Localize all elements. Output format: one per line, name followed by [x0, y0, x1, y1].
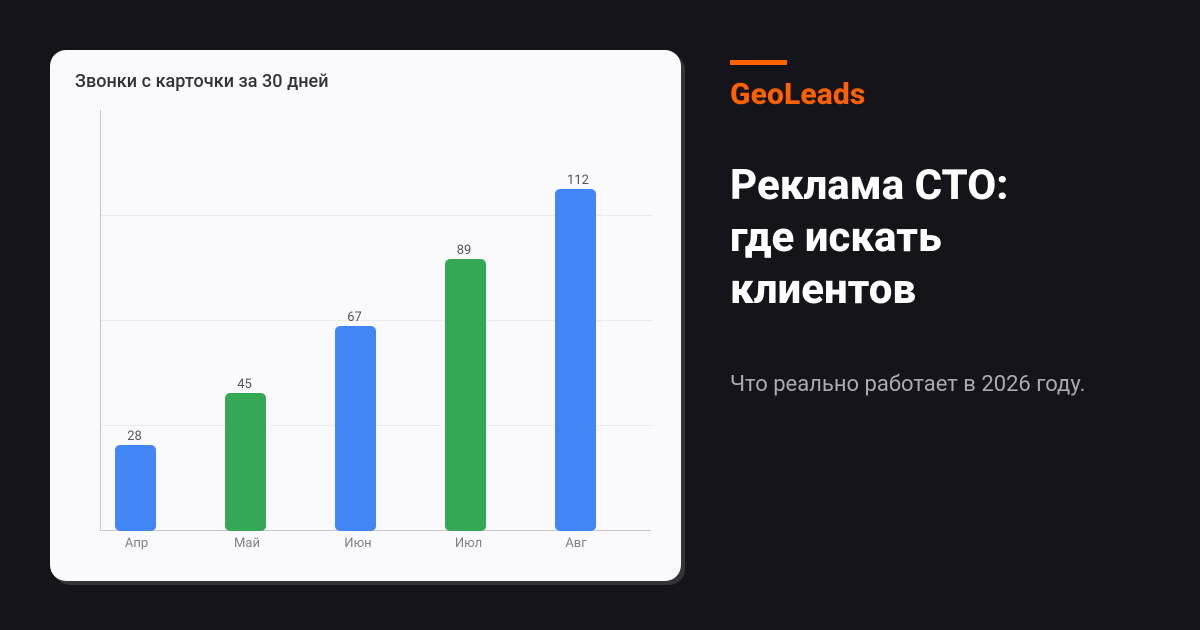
subtitle: Что реально работает в 2026 году. [730, 372, 1085, 397]
main heading: клиентов [730, 265, 916, 314]
bar: Май 45: 45 [237, 377, 252, 392]
bar: Июл 89 [445, 243, 486, 551]
bar: Июл 89: 89 [457, 243, 471, 258]
brand name: GeoLeads [730, 76, 865, 112]
bar: Июн 67: Июн [344, 536, 372, 551]
bar: Июл 89: Июл [455, 536, 482, 551]
main heading [730, 161, 1008, 314]
bar: Июн 67 [335, 310, 376, 551]
main heading: Реклама СТО: [730, 161, 1008, 210]
panel: chart card [50, 50, 681, 581]
chart title: Звонки с карточки за 30 дней [75, 71, 329, 92]
bar: Май 45 [225, 377, 266, 551]
bar: Апр 28 [115, 429, 156, 551]
bar: Апр 28: 28 [127, 429, 142, 444]
bar: Авг 112: Авг [565, 536, 587, 551]
bar: Май 45: Май [234, 536, 260, 551]
accent line [730, 60, 787, 65]
bar: Июн 67: 67 [347, 310, 362, 325]
bar: Апр 28: Апр [125, 536, 148, 551]
main heading: где искать [730, 213, 942, 262]
bar: Авг 112 [555, 173, 596, 551]
bar: Авг 112: 112 [567, 173, 589, 188]
chart axes and grid lines [100, 110, 652, 531]
